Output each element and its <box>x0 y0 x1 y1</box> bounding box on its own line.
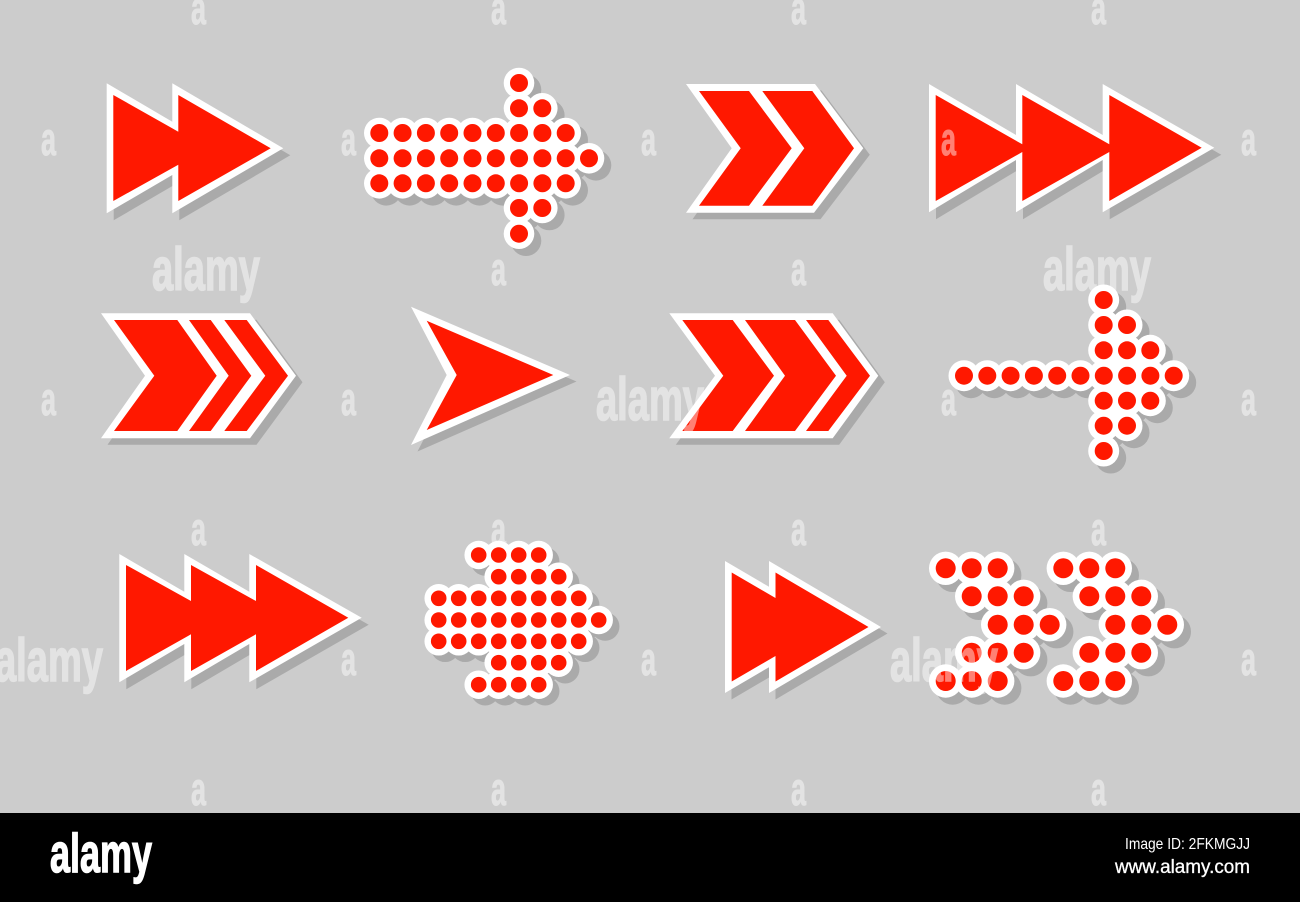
arrow: dotted thin shaft arrow, middle right <box>964 300 1181 458</box>
watermark: small repeated a marks: a <box>341 113 356 165</box>
watermark: small repeated a marks: a <box>791 503 806 555</box>
watermark: small repeated a marks: a <box>341 633 356 685</box>
watermark: small repeated a marks: a <box>41 113 56 165</box>
footer logo: alamy <box>50 822 152 884</box>
website: www.alamy.com <box>1114 857 1250 878</box>
watermark: small repeated a marks: a <box>641 633 656 685</box>
watermark: small repeated a marks: a <box>1091 763 1106 815</box>
watermark: small repeated a marks: a <box>641 113 656 165</box>
watermark: large alamy marks: alamy <box>890 627 998 694</box>
watermark: small repeated a marks: a <box>791 243 806 295</box>
watermark: small repeated a marks: a <box>491 763 506 815</box>
arrow: triple chevron with narrow ends, middle left <box>101 313 302 445</box>
watermark: small repeated a marks: a <box>1091 503 1106 555</box>
arrow: double triangle, top left <box>107 83 290 220</box>
watermark: small repeated a marks: a <box>941 113 956 165</box>
watermark: large alamy marks: alamy <box>152 236 260 303</box>
arrow: triple chevron with wide segments, middle row <box>669 313 885 445</box>
watermark: large alamy marks: alamy <box>0 627 103 694</box>
watermark: small repeated a marks: a <box>191 503 206 555</box>
watermark: small repeated a marks: a <box>791 763 806 815</box>
watermark: small repeated a marks: a <box>41 373 56 425</box>
watermark: small repeated a marks: a <box>341 373 356 425</box>
arrow: triple triangle, top right <box>929 84 1221 219</box>
arrow: plain notched arrowhead, middle row <box>411 307 576 452</box>
watermark: small repeated a marks: a <box>1241 633 1256 685</box>
watermark: small repeated a marks: a <box>941 373 956 425</box>
arrow: double triangle, bottom row <box>725 561 888 700</box>
watermark: small repeated a marks: a <box>491 243 506 295</box>
watermark: small repeated a marks: a <box>1241 373 1256 425</box>
watermark: large alamy marks: alamy <box>596 366 704 433</box>
footer bar <box>0 813 1300 902</box>
watermark: large alamy marks: alamy <box>1043 236 1151 303</box>
watermark: small repeated a marks: a <box>1241 113 1256 165</box>
arrow: dotted wide arrow, bottom row <box>439 555 605 691</box>
image id: Image ID: 2FKMGJJ <box>1125 836 1250 853</box>
arrow: dotted double chevron, bottom right <box>946 568 1174 688</box>
arrow: triple triangle, bottom left <box>119 554 369 689</box>
arrow: double chevron, top row <box>686 84 870 219</box>
watermark: small repeated a marks: a <box>491 503 506 555</box>
watermark: small repeated a marks: a <box>191 763 206 815</box>
watermark: large alamy marks <box>0 236 1151 694</box>
arrow: dotted block arrow, top row <box>379 83 596 241</box>
